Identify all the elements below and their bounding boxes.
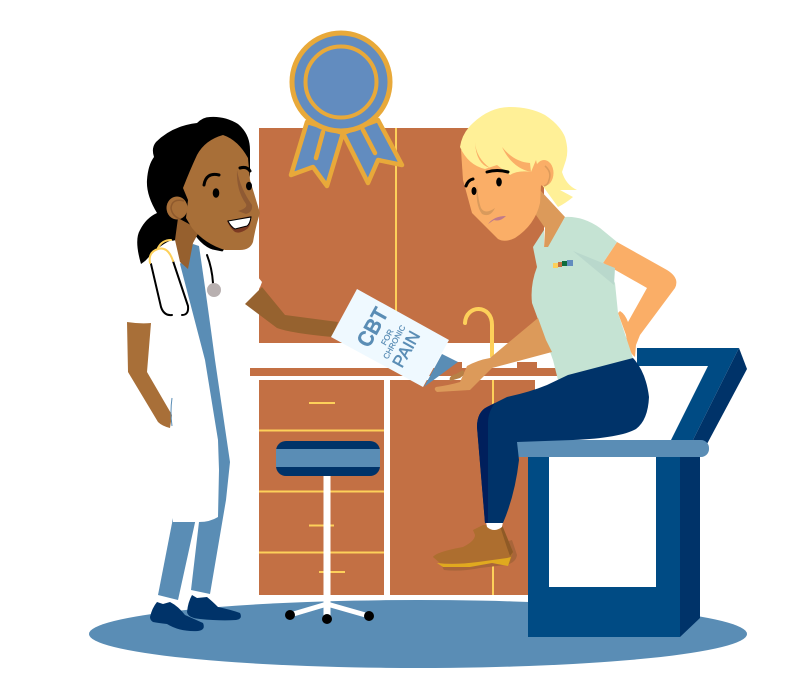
table seat [517,440,709,457]
doctor [127,117,338,631]
patient sock [486,522,503,530]
book title: FOR: FOR [379,327,396,347]
doctor coat [127,240,262,522]
book spine [424,354,458,387]
stool wheels [285,610,374,624]
ribbon tails [291,120,402,186]
book title: CBT: CBT [352,303,394,351]
patient shirt [532,217,633,380]
counter top [250,368,558,376]
doctor left arm [127,322,172,428]
patient hand shadow [450,370,464,381]
doctor right arm [245,287,338,337]
award ribbon [291,33,402,186]
patient hair [460,107,577,207]
patient jeans [477,358,649,523]
book title: PAIN: PAIN [389,328,424,371]
book cover [331,289,449,387]
table base [528,455,700,637]
ribbon medal [292,33,390,131]
table back rest [637,348,747,444]
doctor ear [166,196,188,220]
lower right cabinet [390,380,535,595]
doctor neck [175,218,200,269]
patient features [466,170,508,224]
patient table arm [435,318,552,392]
stool seat [276,441,380,476]
floor ellipse [89,600,747,668]
patient shoe [433,525,517,571]
doctor scrub strip and right trouser leg [180,244,230,594]
patient hair highlights [475,142,531,172]
doctor left trouser leg [158,518,196,600]
doctor hair [137,117,250,264]
shirt shadow [573,251,615,285]
patient [433,107,676,571]
book title: CHRONIC: CHRONIC [381,324,408,361]
doctor face [183,135,260,250]
stethoscope [150,240,221,315]
shirt pin [553,260,573,268]
stool [276,441,380,624]
doctor features [204,167,252,233]
faucet [465,309,492,356]
lower left cabinet [259,380,384,595]
patient neck [536,190,565,248]
upper cabinet [259,128,544,343]
patient face [461,125,543,241]
patient ear [534,160,554,186]
doctor shoes [150,595,241,631]
exam table [517,348,747,637]
CBT for chronic pain book [331,289,458,387]
stool post and legs [290,470,369,618]
patient back arm [603,242,676,357]
sink blocks [440,362,537,368]
coat pocket line [171,398,172,426]
cabinets [250,128,558,595]
